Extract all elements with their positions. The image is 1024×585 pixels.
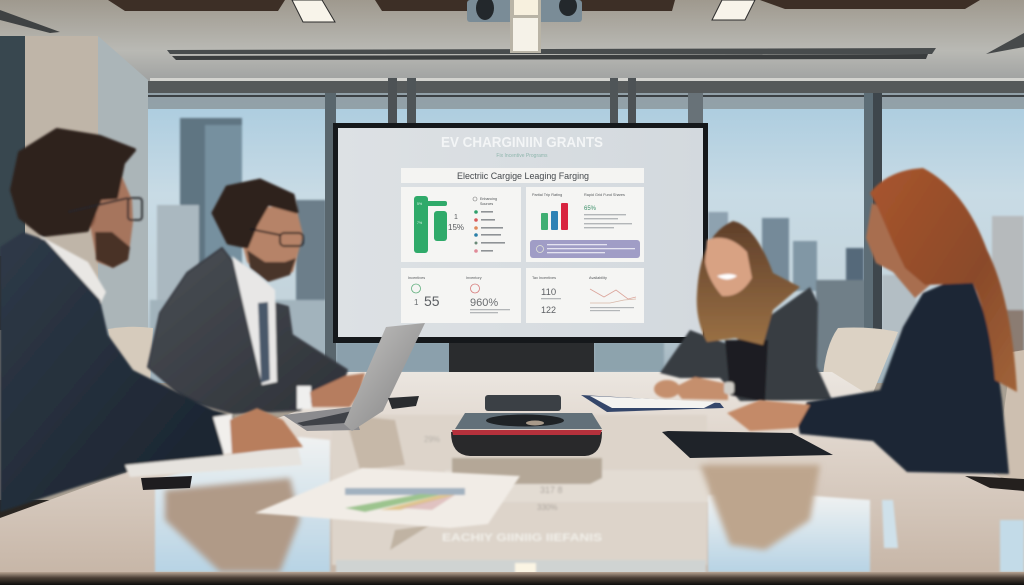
callout: [530, 240, 640, 258]
panel: percentage stats: 960%: [470, 297, 498, 309]
presentation screen: [333, 123, 708, 343]
face: [866, 203, 930, 298]
panel: battery bars and legend: [401, 187, 521, 262]
person 3: woman in centre: [654, 221, 832, 402]
black folder: [662, 431, 833, 458]
hands: [654, 377, 734, 400]
panel: battery bars and legend: Enhancing: [480, 197, 497, 201]
panel: percentage stats: 55: [424, 293, 440, 309]
cuff and hand: [213, 408, 303, 454]
document with chart: [255, 468, 520, 528]
hair: [12, 130, 134, 235]
room backdrop: [0, 330, 1024, 500]
panel: numbers and line chart: [526, 268, 644, 323]
screen subtitle: Fix Incentive Programs: [496, 153, 548, 159]
panel: percentage stats: Inventory: [466, 276, 482, 280]
panel: bar chart and callout: Partial Trip Rating: [532, 193, 562, 197]
person 4: woman on right: [727, 168, 1017, 474]
panel: numbers and line chart: 110: [541, 287, 556, 298]
panel: battery bars and legend: 1: [454, 214, 458, 221]
cuff and hand: [297, 373, 365, 409]
hair: [213, 180, 297, 247]
person 2: man with laptop: [148, 180, 365, 413]
panel: battery bars and legend: 5%: [417, 202, 422, 206]
ceiling lights: [292, 0, 755, 22]
suit: [0, 232, 234, 512]
pillar and left wall: [0, 36, 148, 340]
hair: [697, 221, 800, 345]
chairs: [108, 327, 1024, 482]
screen title: EV CHARGINIIN GRANTS: [441, 134, 603, 151]
suit: [148, 248, 347, 413]
reflected title: EACHIY GIINIIG IIEFANIS: [442, 532, 602, 544]
table reflections: [155, 415, 1024, 576]
glasses: [68, 198, 142, 220]
person 1: man in foreground: [0, 130, 303, 512]
panel: battery bars and legend: 15%: [448, 223, 464, 232]
conference speaker: [451, 413, 602, 456]
laptop: [283, 323, 425, 431]
hand: [727, 400, 810, 431]
table top: [0, 372, 1024, 577]
panel: numbers and line chart: 122: [541, 305, 556, 315]
city skyline: [150, 118, 1024, 380]
chair base at right: [965, 476, 1024, 491]
document folder on table: [581, 395, 724, 412]
glasses: [250, 229, 303, 246]
ceiling: [0, 0, 1024, 92]
table reflections: 317 8: [540, 485, 563, 495]
panel: percentage stats: Incentives: [408, 276, 425, 280]
small dark device: [485, 395, 561, 411]
window with sky: [148, 93, 1024, 383]
hair: [870, 168, 1017, 392]
panel: percentage stats: 1: [414, 298, 419, 307]
panel: battery bars and legend: Sources: [480, 202, 493, 206]
table reflections: 29%: [424, 435, 440, 444]
face: [240, 207, 303, 281]
table reflections: 330%: [537, 503, 557, 512]
window frames: [148, 78, 1024, 371]
panel: numbers and line chart: Tax Incentives: [532, 276, 556, 280]
face: [85, 165, 133, 268]
table front edge: [0, 572, 1024, 585]
screen heading band: [401, 168, 644, 183]
shirt and tie: [232, 256, 277, 385]
phone on table: [141, 476, 192, 490]
screen stand: [449, 340, 594, 373]
face: [705, 238, 752, 296]
panel: percentage stats: [401, 268, 521, 323]
collar: [40, 236, 106, 305]
screen heading band: Electriic Cargige Leaging Farging: [457, 171, 589, 182]
panel: bar chart and callout: 65%: [584, 206, 597, 212]
panel: bar chart and callout: [526, 187, 644, 262]
notebook: [125, 448, 302, 477]
jacket: [797, 280, 1009, 474]
ceiling projector and light fitting: [467, 0, 582, 53]
jacket: [660, 287, 832, 401]
panel: numbers and line chart: Availability: [589, 276, 607, 280]
panel: battery bars and legend: 7%: [417, 221, 422, 225]
panel: bar chart and callout: Rapid Grid Fund Shares: [584, 193, 625, 197]
